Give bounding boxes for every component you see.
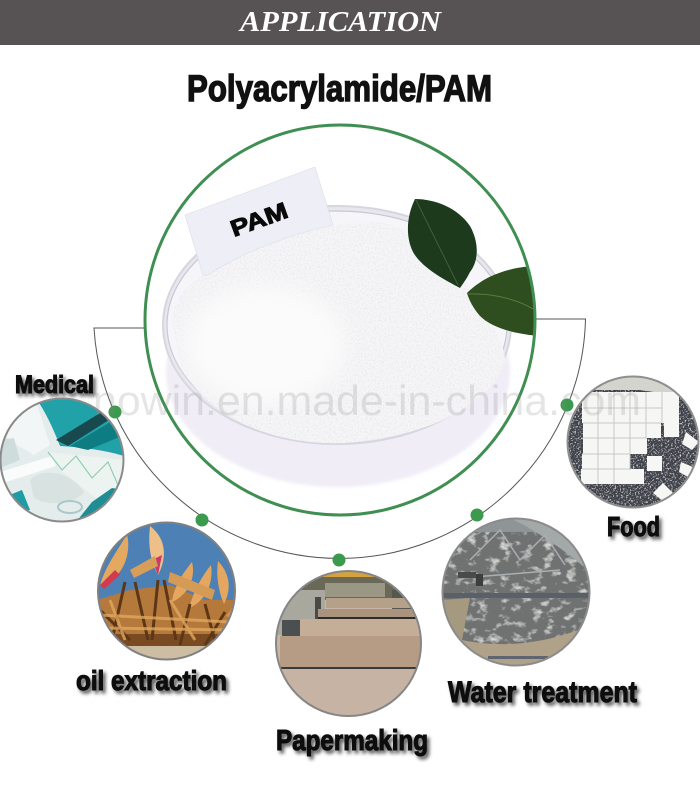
panel: medical photo	[0, 398, 124, 522]
petri dish	[163, 206, 511, 487]
sugar cubes	[581, 392, 699, 502]
PAM card: PAM	[227, 197, 291, 242]
connector arc	[94, 319, 586, 558]
header text: APPLICATION	[238, 6, 442, 38]
white powder mound	[172, 222, 505, 443]
panel: water treatment photo	[442, 518, 590, 668]
panel: food photo	[566, 375, 700, 510]
label: Papermaking: Papermaking	[276, 725, 428, 757]
label: Food: Food	[607, 511, 660, 542]
pumpjack heads	[100, 534, 128, 585]
panel: papermaking photo	[275, 570, 436, 718]
label: Water treatment: Water treatment	[448, 676, 637, 709]
label: Medical: Medical	[15, 371, 94, 399]
watermark: nowin.en.made-in-china.com	[93, 377, 641, 424]
connector dots	[108, 398, 574, 566]
panel: main product circle	[140, 120, 540, 520]
label: oil extraction: oil extraction	[76, 665, 227, 696]
PAM card	[185, 167, 333, 275]
green ring	[145, 125, 535, 515]
panel: oil extraction photo	[97, 522, 237, 662]
leaves	[408, 199, 540, 336]
header bar	[0, 0, 700, 45]
title: Polyacrylamide/PAM	[187, 68, 492, 109]
